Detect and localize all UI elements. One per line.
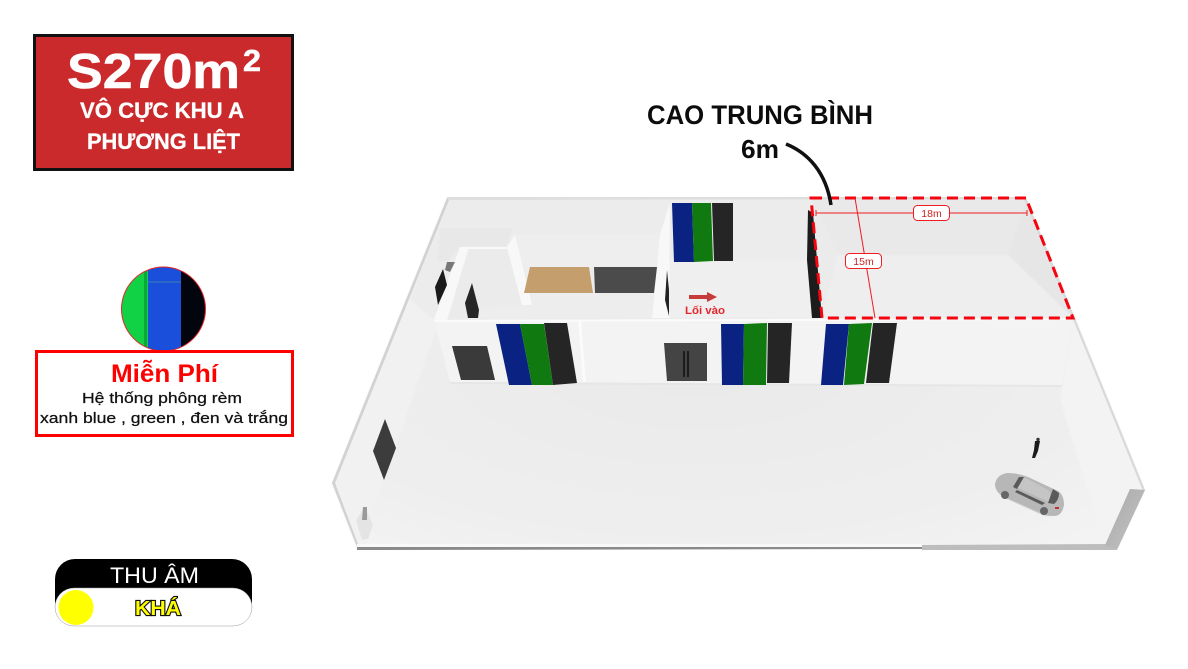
icon: corner box (356, 507, 373, 540)
car body (995, 473, 1064, 516)
curtains: front centre (721, 323, 792, 385)
offer heading: Miễn Phí (111, 358, 219, 388)
icon: side door (665, 270, 669, 316)
car tail light (1055, 507, 1059, 509)
wall base shade (450, 382, 1062, 387)
right wall (1060, 318, 1145, 545)
entry label: Lối vào (685, 305, 725, 317)
front partition wall (434, 318, 1073, 385)
entry room floor (657, 260, 812, 318)
left wall door (435, 269, 447, 305)
left wall (332, 198, 447, 546)
icon: curtain swatch (121, 266, 206, 350)
icon: wood floor sample (524, 267, 593, 293)
dimension: 18m width: 18m (921, 208, 942, 220)
corridor wall (652, 203, 670, 318)
zone A back wall (811, 198, 1026, 255)
crisp wall faces (332, 197, 1145, 547)
dimension: 15m depth: 15m (853, 256, 874, 268)
zone A floor (822, 255, 1073, 318)
car windows (1013, 477, 1059, 505)
panel: free curtain offer (36, 352, 292, 436)
area heading: 2 (243, 43, 261, 78)
black side curtain (807, 210, 822, 318)
top edge (447, 197, 1026, 200)
floor front edge (357, 544, 1117, 550)
rear cell (437, 228, 512, 262)
height label: CAO TRUNG BÌNH (647, 99, 873, 130)
right edge (1024, 198, 1145, 491)
zone A dashed outline (811, 198, 1073, 318)
car wheels (1001, 491, 1009, 499)
small room door (465, 283, 479, 318)
dimension: 18m width (816, 206, 1027, 220)
zone A left wall (811, 198, 838, 318)
icon: yellow indicator (58, 590, 94, 625)
rear cell box (445, 262, 455, 272)
right corner wall (1105, 489, 1145, 550)
car shadow (1000, 496, 1062, 516)
entry room wall (668, 198, 810, 260)
hall floor (332, 198, 1145, 549)
panel: sound rating (55, 559, 252, 626)
dimension: 15m depth (846, 198, 882, 318)
title panel (34, 36, 292, 170)
arrow: height pointer (786, 144, 831, 205)
small room wall top (434, 247, 469, 320)
sound rating value: KHÁ (135, 597, 181, 620)
location line 1: VÔ CỰC KHU A (80, 98, 244, 123)
zone A right wall (1008, 198, 1073, 318)
back wall of storage (512, 235, 660, 267)
height callout (647, 99, 873, 205)
curtains: rear wall (672, 203, 733, 262)
car roof (1016, 478, 1050, 502)
area heading: S270m (67, 45, 240, 99)
icon: dark floor sample (594, 267, 657, 293)
left edge (332, 198, 449, 547)
rear zone floor (410, 198, 670, 320)
icon: diamond door (373, 419, 396, 480)
icon: car (995, 473, 1064, 516)
small room interior (448, 247, 522, 320)
sound label: THU ÂM (110, 563, 199, 588)
curtains: front left (496, 323, 577, 385)
offer line 2: xanh blue , green , đen và trắng (40, 410, 288, 427)
location line 2: PHƯƠNG LIỆT (87, 129, 241, 154)
icon: person (1032, 438, 1040, 458)
height value: 6m (741, 134, 779, 164)
floor plan (332, 197, 1145, 550)
door: front left (452, 346, 495, 380)
shell surfaces (332, 198, 1145, 549)
offer line 1: Hệ thống phông rèm (82, 390, 242, 407)
icon: entry arrow (689, 292, 717, 302)
door: front centre (664, 343, 707, 381)
storage floor (477, 293, 654, 318)
curtains: front right (821, 323, 897, 385)
